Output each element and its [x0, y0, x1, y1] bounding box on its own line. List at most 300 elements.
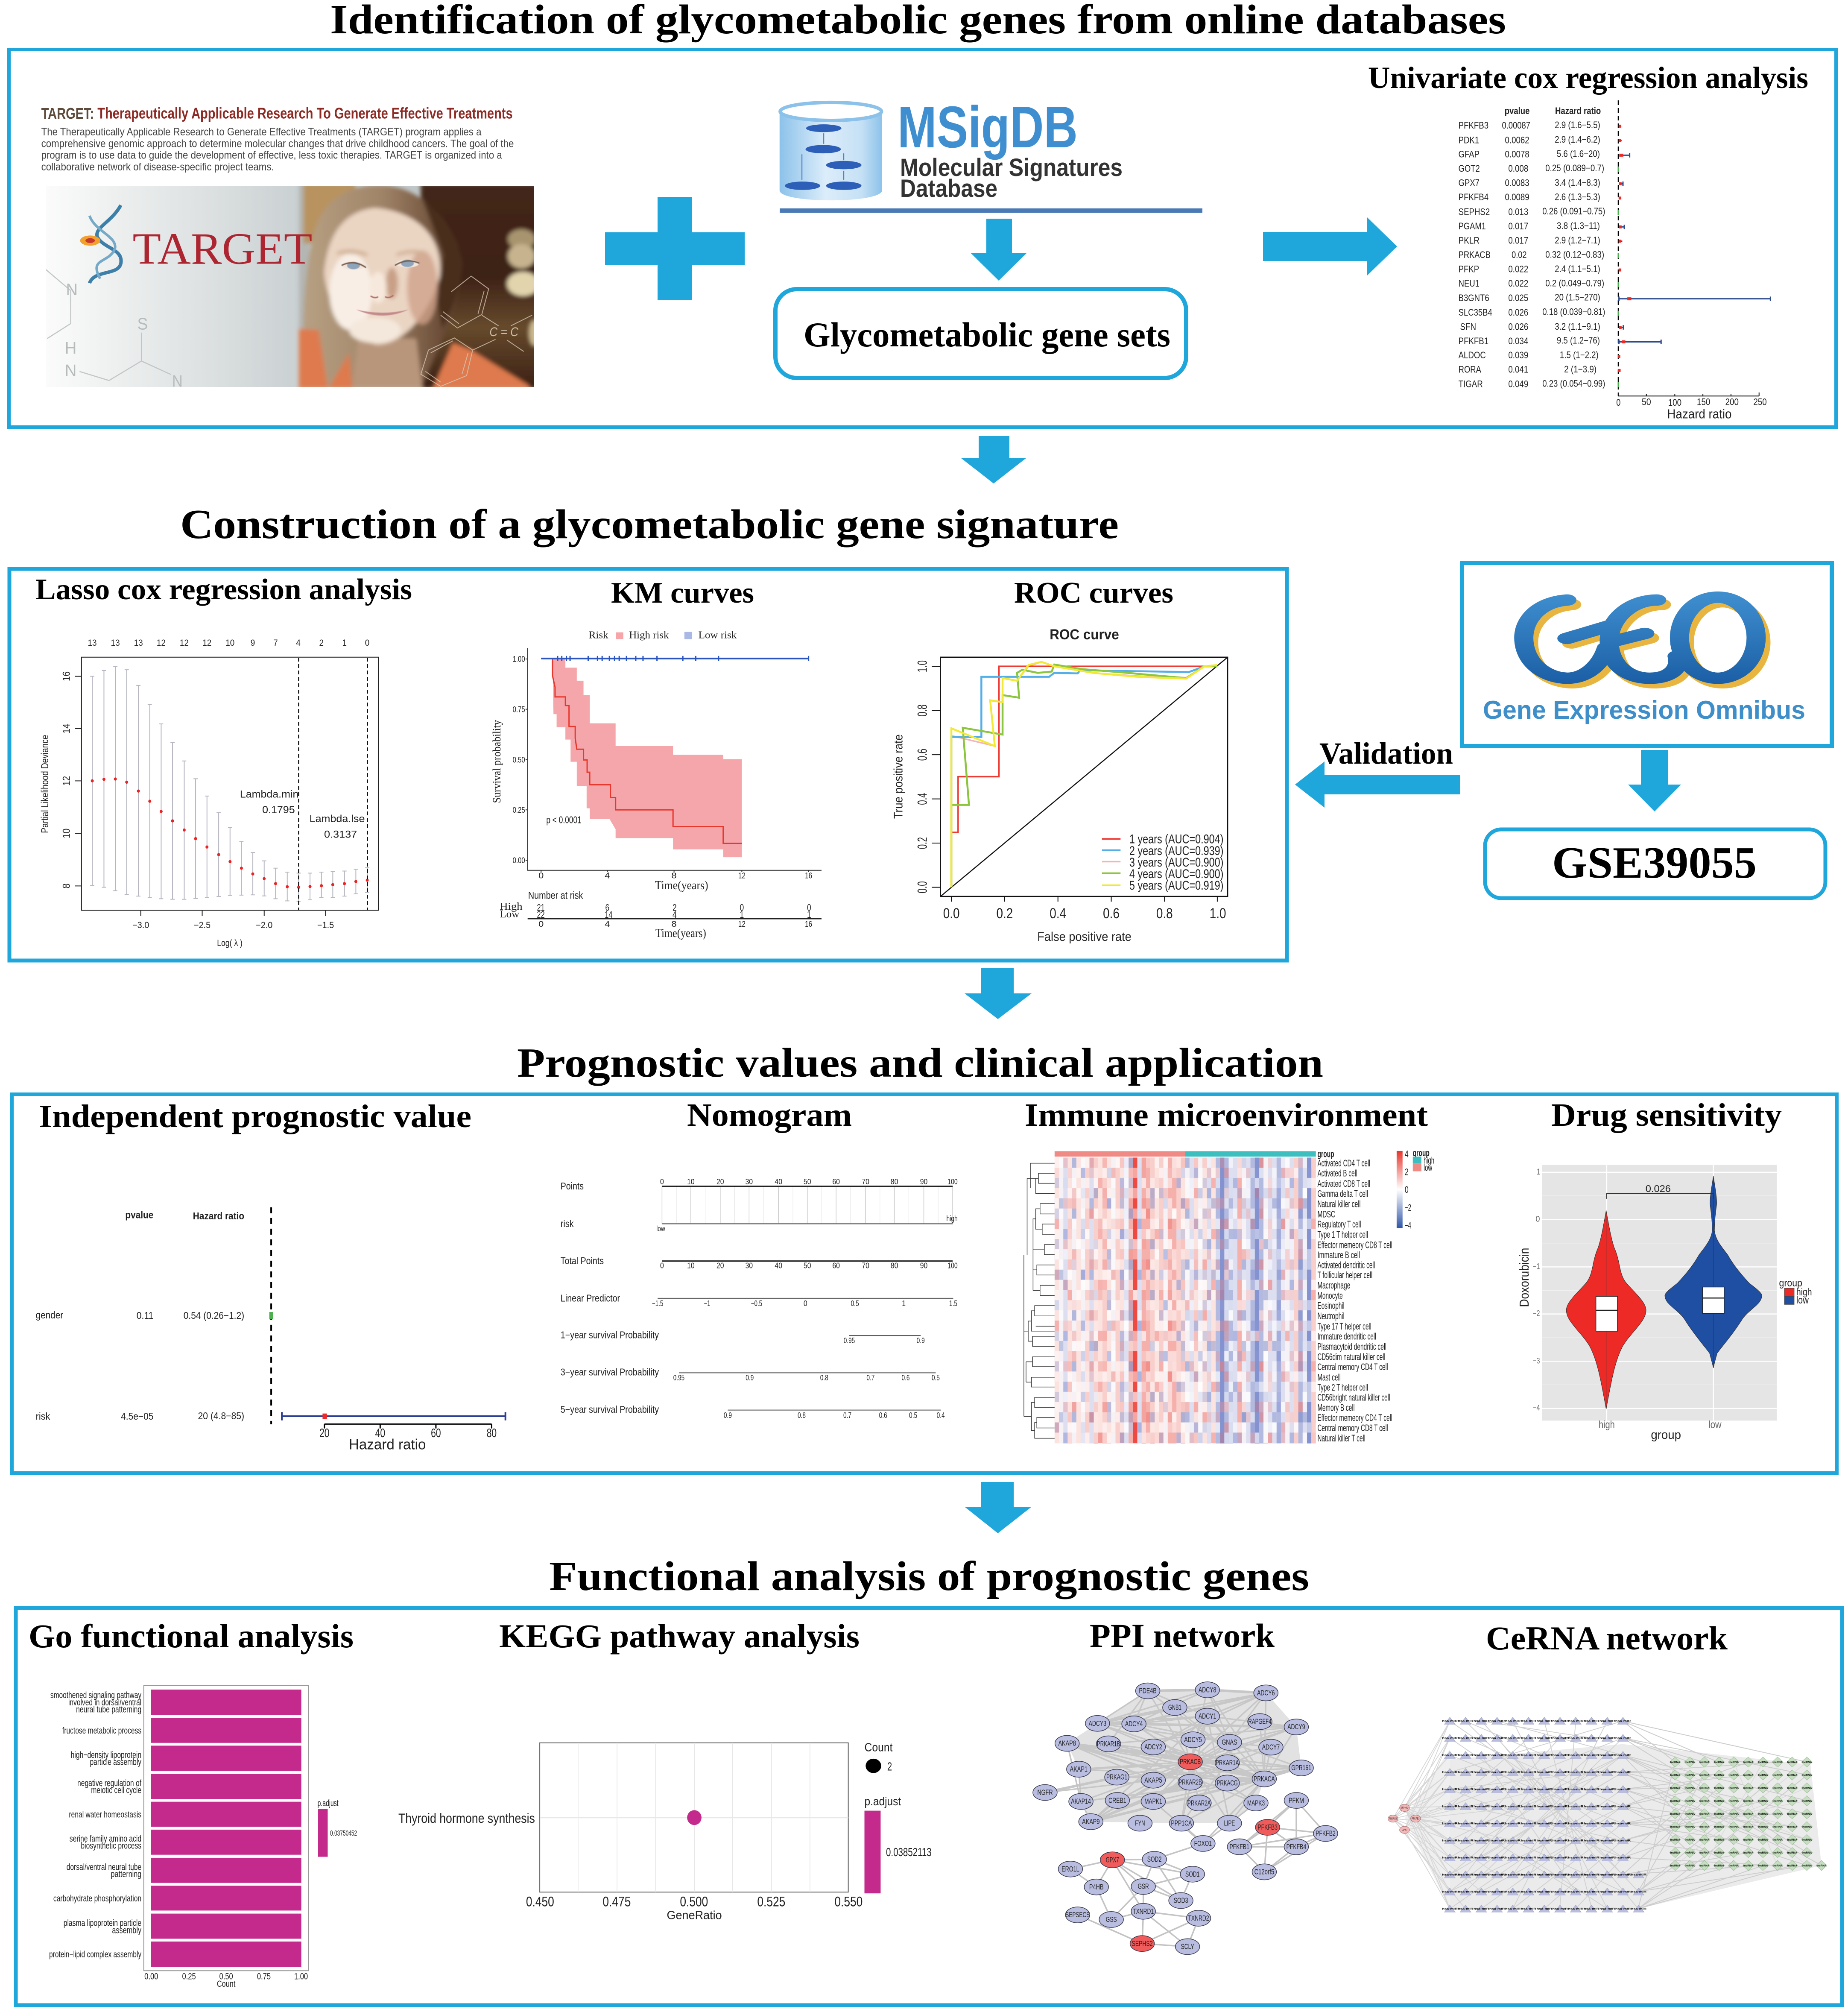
- lasso chart: −3.0: [132, 920, 149, 930]
- PPI network graph: CREB1: [1108, 1796, 1126, 1804]
- forest plot: univariate: [1459, 100, 1770, 421]
- GO bar chart: assembly: [112, 1925, 141, 1936]
- panel: online databases: program is to use data to guide the development of effective, less toxic therapies. TARGET is organized into a: [41, 149, 502, 161]
- forest plot: independent: Hazard ratio: [193, 1211, 244, 1221]
- forest plot: univariate: GOT2: [1459, 163, 1480, 174]
- GO bar chart: negative regulation of: [77, 1778, 141, 1788]
- forest plot: univariate: 0.26 (0.091−0.75): [1542, 206, 1605, 217]
- heatmap: 2: [1405, 1166, 1409, 1177]
- KM survival chart: 8: [672, 919, 677, 928]
- forest plot: independent: [36, 1207, 506, 1453]
- forest plot: univariate: 200: [1725, 396, 1739, 407]
- GO bar chart: neural tube patterning: [76, 1705, 141, 1715]
- heatmap: Gamma delta T cell: [1317, 1188, 1368, 1199]
- heatmap: Macrophage: [1317, 1280, 1350, 1291]
- arrow: section 1 to 2: [961, 436, 1026, 483]
- forest plot: univariate: SFN: [1460, 321, 1476, 332]
- lasso chart: 8: [61, 884, 72, 888]
- panel: functional analysis: 0.03750452: [330, 1829, 357, 1837]
- arrow: section 3 to 4: [965, 1482, 1032, 1533]
- TARGET description block: [41, 105, 514, 173]
- heatmap: Immature dendritic cell: [1317, 1331, 1376, 1341]
- GO bar chart: meiotic cell cycle: [91, 1785, 141, 1795]
- forest plot: univariate: PFKP: [1459, 264, 1479, 275]
- nomogram chart: 80: [891, 1261, 898, 1270]
- label: validation: Validation: [1319, 736, 1453, 770]
- lasso chart: −1.5: [317, 920, 334, 930]
- forest plot: univariate: 100: [1668, 397, 1681, 408]
- PPI network graph: PFKM: [1289, 1796, 1304, 1804]
- forest plot: univariate: 0.00087: [1502, 120, 1530, 131]
- lasso chart: 7: [273, 638, 278, 648]
- KM survival chart: 1.00: [513, 654, 525, 664]
- KM survival chart: Low risk: [699, 629, 737, 641]
- violin plot: group: [1651, 1428, 1681, 1441]
- PPI network graph: AKAP8: [1058, 1739, 1076, 1748]
- panel: prognostic values: 1.5: [949, 1299, 957, 1308]
- GO bar chart: biosynthetic process: [81, 1841, 141, 1851]
- heatmap: Type 2 T helper cell: [1317, 1382, 1368, 1393]
- forest plot: independent: risk: [36, 1411, 50, 1422]
- violin plot: 1: [1537, 1167, 1541, 1177]
- KM survival chart: Number at risk: [528, 890, 583, 901]
- heatmap: Natural killer cell: [1317, 1199, 1360, 1209]
- PPI network graph: ERO1L: [1061, 1865, 1079, 1873]
- violin plot: −3: [1533, 1356, 1540, 1365]
- forest plot: univariate: 0.025: [1508, 293, 1528, 303]
- PPI network graph: C12orf5: [1254, 1868, 1274, 1876]
- KM survival chart: 6: [605, 902, 609, 913]
- PPI network graph: SEPSECS: [1065, 1911, 1090, 1919]
- forest plot: univariate: 0.017: [1508, 235, 1528, 246]
- PPI network graph: GPX7: [1106, 1856, 1119, 1864]
- forest plot: univariate: 2.9 (1.2−7.1): [1555, 235, 1600, 246]
- girl portrait: C = C: [489, 325, 519, 339]
- GO bar chart: fructose metabolic process: [62, 1725, 141, 1736]
- forest plot: univariate: PFKFB1: [1459, 335, 1488, 346]
- forest plot: independent: 80: [487, 1426, 497, 1440]
- KEGG dot plot: 0.550: [834, 1894, 863, 1909]
- KM survival chart: 4: [605, 871, 610, 880]
- ROC chart: 0.2: [915, 837, 930, 849]
- lasso chart: Lambda.lse: [310, 813, 365, 824]
- forest plot: univariate: 0: [1616, 397, 1620, 408]
- CeRNA network graph: PFKFB3: [1412, 1817, 1419, 1820]
- nomogram chart: Total Points: [561, 1256, 604, 1266]
- nomogram chart: 0.9: [746, 1374, 754, 1382]
- girl portrait: [299, 184, 540, 389]
- panel frame: [9, 50, 1836, 427]
- nomogram chart: 40: [775, 1261, 782, 1270]
- heatmap: Activated CD4 T cell: [1317, 1158, 1370, 1169]
- GO bar chart: protein−lipid complex assembly: [49, 1949, 141, 1959]
- lasso chart: 16: [61, 671, 72, 681]
- forest plot: univariate: 0.022: [1508, 264, 1528, 275]
- lasso chart: 10: [225, 638, 234, 648]
- nomogram chart: −0.5: [751, 1299, 762, 1308]
- lasso chart: 9: [251, 638, 255, 648]
- KM survival chart: 16: [805, 871, 812, 880]
- arrow: to univariate analysis: [1263, 217, 1397, 275]
- PPI network graph: ADCY9: [1287, 1723, 1305, 1731]
- PPI network graph: MAPK3: [1247, 1799, 1265, 1807]
- nomogram chart: Points: [561, 1181, 584, 1192]
- forest plot: independent: 20 (4.8−85): [198, 1411, 244, 1421]
- KEGG dot plot: 0.525: [757, 1894, 785, 1909]
- KM survival chart: Survival probability: [490, 720, 503, 803]
- ROC chart: 0.4: [1050, 905, 1066, 922]
- nomogram chart: 20: [716, 1261, 724, 1270]
- forest plot: univariate: 0.0083: [1505, 177, 1529, 188]
- panel: functional analysis: 0.03852113: [886, 1845, 932, 1859]
- forest plot: univariate: 3.2 (1.1−9.1): [1555, 321, 1600, 332]
- GO bar chart: 0.50: [219, 1971, 233, 1981]
- ROC chart: True positive rate: [891, 734, 905, 819]
- nomogram chart: 0.5: [932, 1374, 940, 1382]
- nomogram chart: 0.95: [673, 1374, 684, 1382]
- PPI network graph: NGFR: [1037, 1788, 1053, 1797]
- heatmap: −4: [1405, 1220, 1411, 1230]
- forest plot: univariate: GFAP: [1459, 149, 1480, 160]
- forest plot: independent: Hazard ratio: [349, 1436, 426, 1453]
- lasso chart: Lambda.min: [240, 788, 298, 800]
- nomogram chart: 0.6: [901, 1374, 910, 1382]
- KM survival chart: [490, 629, 822, 940]
- KM survival chart: 0: [740, 902, 744, 913]
- PPI network graph: [1033, 1682, 1338, 1955]
- box: glycometabolic gene sets: Glycometabolic gene sets: [804, 315, 1170, 354]
- panel: prognostic values: high: [1796, 1286, 1812, 1297]
- nomogram chart: 90: [920, 1177, 927, 1186]
- KM survival chart: 16: [805, 919, 812, 928]
- panel: signature construction: 1 years (AUC=0.904): [1129, 832, 1223, 846]
- PPI network graph: LIPE: [1224, 1819, 1235, 1828]
- forest plot: univariate: PFKFB4: [1459, 192, 1488, 202]
- nomogram chart: 10: [687, 1177, 695, 1186]
- nomogram chart: −1.5: [652, 1299, 663, 1308]
- GO bar chart: serine family amino acid: [70, 1833, 141, 1844]
- lasso chart: 0: [365, 638, 369, 648]
- MSigDB logo: Database: [900, 175, 997, 202]
- box: GSE39055: [1485, 829, 1825, 898]
- PPI network graph: MAPK1: [1144, 1797, 1162, 1806]
- forest plot: univariate: 50: [1642, 396, 1651, 407]
- ROC chart: [891, 626, 1228, 943]
- title: prognostic: Prognostic values and clinical application: [517, 1040, 1323, 1086]
- panel: prognostic values: 100: [947, 1177, 958, 1186]
- ROC chart: 0.0: [915, 881, 930, 893]
- PPI network graph: ADCY2: [1144, 1743, 1162, 1751]
- forest plot: univariate: 0.041: [1508, 364, 1528, 375]
- lasso chart: 13: [111, 638, 120, 648]
- panel: prognostic values: Central memory CD8 T cell: [1317, 1423, 1388, 1433]
- KM survival chart: 0: [538, 919, 544, 928]
- nomogram chart: 30: [745, 1261, 753, 1270]
- nomogram chart: 40: [775, 1177, 782, 1186]
- forest plot: independent: 60: [431, 1426, 441, 1440]
- MSigDB logo: Molecular Signatures: [900, 154, 1123, 182]
- panel: prognostic values: [12, 1094, 1837, 1473]
- nomogram chart: 10: [687, 1261, 695, 1270]
- nomogram chart: 0.8: [820, 1374, 828, 1382]
- heading: CeRNA: CeRNA network: [1486, 1620, 1728, 1657]
- KM survival chart: High risk: [629, 629, 669, 641]
- heading: PPI: PPI network: [1090, 1617, 1275, 1654]
- GEO swirl mark with text name: [1524, 597, 1761, 683]
- PPI network graph: ADCY8: [1199, 1686, 1216, 1694]
- forest plot: univariate: Hazard ratio: [1555, 105, 1601, 116]
- forest plot: univariate: GPX7: [1459, 177, 1480, 188]
- violin plot: high: [1599, 1419, 1615, 1431]
- panel: prognostic values: CD56bright natural killer cell: [1317, 1392, 1390, 1403]
- KM survival chart: 0.75: [513, 704, 525, 714]
- ROC chart: 0.6: [1103, 905, 1120, 922]
- nomogram chart: risk: [561, 1218, 574, 1229]
- PPI network graph: PRKAR2B: [1178, 1778, 1202, 1787]
- CeRNA network graph: [1388, 1714, 1829, 1919]
- panel: prognostic values: 100: [947, 1261, 958, 1270]
- lasso chart: 0.3137: [324, 828, 357, 840]
- PPI network graph: PRKACB: [1180, 1757, 1201, 1766]
- GO bar chart: [49, 1686, 357, 1989]
- PPI network graph: ADCY1: [1199, 1712, 1216, 1720]
- PPI network graph: FYN: [1135, 1819, 1145, 1828]
- forest plot: univariate: B3GNT6: [1459, 293, 1489, 303]
- heatmap: Mast cell: [1317, 1372, 1341, 1382]
- nomogram chart: 0.95: [844, 1336, 855, 1345]
- KM survival chart: 1: [807, 910, 811, 920]
- forest plot: univariate: 150: [1697, 396, 1710, 407]
- forest plot: univariate: 0.039: [1508, 350, 1528, 360]
- GEO logo box: Gene Expression Omnibus: [1483, 696, 1805, 724]
- KM survival chart: 4: [605, 919, 610, 928]
- KEGG dot plot: 2: [887, 1760, 892, 1773]
- KEGG dot plot: [398, 1740, 932, 1922]
- heatmap: Immature B cell: [1317, 1250, 1360, 1260]
- nomogram chart: 60: [832, 1261, 840, 1270]
- forest plot: univariate: 0.32 (0.12−0.83): [1545, 249, 1604, 260]
- KEGG dot plot: 0.500: [680, 1894, 708, 1909]
- lasso chart: 13: [134, 638, 143, 648]
- PPI network graph: GPR161: [1291, 1764, 1311, 1772]
- violin plot: 0.026: [1646, 1183, 1671, 1194]
- panel: online databases: [9, 50, 1836, 427]
- panel: online databases: The Therapeutically Applicable Research to Generate Effective Treatments (TARGET) program applies a: [41, 126, 482, 138]
- heatmap: Natural killer T cell: [1317, 1433, 1366, 1444]
- GO bar chart: 1.00: [294, 1971, 308, 1981]
- nomogram chart: 0.4: [937, 1411, 945, 1420]
- heatmap: Eosinophil: [1317, 1300, 1345, 1311]
- heading: nomogram: Nomogram: [687, 1097, 852, 1133]
- forest plot: univariate: 0.0062: [1505, 135, 1529, 145]
- GO bar chart: dorsal/ventral neural tube: [67, 1862, 141, 1872]
- GO bar chart: involved in dorsal/ventral: [68, 1697, 141, 1707]
- CeRNA network graph: SEPHS2: [1401, 1806, 1409, 1810]
- forest plot: univariate: 0.0078: [1505, 149, 1529, 160]
- panel: prognostic values: high: [946, 1214, 958, 1223]
- panel: functional analysis: [16, 1608, 1842, 2005]
- violin plot: −1: [1533, 1262, 1540, 1271]
- forest plot: univariate: 0.022: [1508, 278, 1528, 289]
- KM survival chart: 12: [738, 871, 746, 880]
- lasso chart: 0.1795: [262, 804, 295, 816]
- PPI network graph: RAPGEF4: [1248, 1717, 1272, 1726]
- PPI network graph: ADCY7: [1262, 1743, 1280, 1751]
- KM survival chart: 0.00: [513, 855, 525, 865]
- forest plot: univariate: ALDOC: [1459, 350, 1486, 360]
- violin plot: [1517, 1165, 1812, 1441]
- forest plot: univariate: 0.017: [1508, 221, 1528, 231]
- heatmap: −2: [1405, 1202, 1411, 1213]
- panel: signature construction: 5 years (AUC=0.919): [1129, 878, 1223, 892]
- lasso chart: 12: [180, 638, 189, 648]
- TARGET logo and chemistry marks: N: [65, 361, 76, 380]
- forest plot: univariate: 0.18 (0.039−0.81): [1542, 306, 1605, 317]
- forest plot: univariate: PDK1: [1459, 135, 1479, 145]
- nomogram chart: [561, 1177, 958, 1420]
- TARGET logo and chemistry marks: TARGET: [132, 224, 312, 273]
- ROC chart: 0.6: [915, 749, 930, 761]
- GO bar chart: particle assembly: [90, 1757, 141, 1767]
- PPI network graph: SOD3: [1174, 1896, 1188, 1905]
- nomogram chart: 1−year survival Probability: [561, 1330, 659, 1341]
- forest plot: univariate: PGAM1: [1459, 221, 1486, 231]
- KM survival chart: 14: [605, 910, 612, 920]
- forest plot: univariate: 9.5 (1.2−76): [1557, 335, 1600, 346]
- nomogram chart: 0.9: [917, 1336, 925, 1345]
- lasso chart: 14: [61, 723, 72, 733]
- lasso chart: −2.5: [194, 920, 211, 930]
- nomogram chart: Linear Predictor: [561, 1293, 620, 1303]
- nomogram chart: low: [656, 1224, 665, 1233]
- heatmap: [1024, 1148, 1434, 1444]
- forest plot: univariate: RORA: [1459, 364, 1481, 375]
- forest plot: univariate: 0.23 (0.054−0.99): [1542, 378, 1605, 389]
- PPI network graph: GNB1: [1168, 1703, 1181, 1712]
- panel frame: [12, 1094, 1837, 1473]
- KM survival chart: 4: [673, 910, 677, 920]
- forest plot: univariate: 0.034: [1508, 335, 1528, 346]
- KEGG dot plot: Thyroid hormone synthesis: [398, 1810, 535, 1825]
- PPI network graph: PRKAR1B: [1097, 1740, 1120, 1748]
- heading: GO: Go functional analysis: [29, 1617, 354, 1655]
- lasso chart: 12: [202, 638, 211, 648]
- lasso chart: 13: [88, 638, 97, 648]
- forest plot: univariate: 2.6 (1.3−5.3): [1555, 191, 1600, 202]
- forest plot: univariate: 0.026: [1508, 307, 1528, 318]
- ROC chart: 0.8: [915, 705, 930, 717]
- heading: immune microenvironment: Immune microenvironment: [1025, 1097, 1428, 1133]
- PPI network graph: PFKFB1: [1229, 1842, 1249, 1851]
- PPI network graph: AKAP5: [1144, 1776, 1162, 1784]
- panel frame: [16, 1608, 1842, 2005]
- forest plot: univariate: SEPHS2: [1459, 206, 1490, 217]
- nomogram chart: −1: [704, 1299, 710, 1308]
- ROC chart: 0.0: [943, 905, 959, 922]
- nomogram chart: 1: [902, 1299, 906, 1308]
- KM survival chart: p < 0.0001: [546, 814, 582, 826]
- lasso chart: [39, 638, 378, 948]
- forest plot: univariate: 2.9 (1.6−5.5): [1555, 120, 1600, 130]
- forest plot: univariate: PRKACB: [1459, 249, 1491, 260]
- heatmap: Activated B cell: [1317, 1168, 1357, 1178]
- ROC chart: False positive rate: [1037, 929, 1132, 943]
- arrow: MSigDB to gene sets: [971, 219, 1026, 281]
- title: functional analysis: Functional analysis of prognostic genes: [549, 1553, 1309, 1599]
- heatmap: Activated CD8 T cell: [1317, 1178, 1370, 1189]
- lasso chart: −2.0: [256, 920, 272, 930]
- nomogram chart: 20: [716, 1177, 724, 1186]
- KM survival chart: High: [500, 901, 523, 912]
- nomogram chart: 0.9: [724, 1411, 732, 1420]
- TARGET logo and chemistry marks: S: [137, 314, 148, 333]
- GO bar chart: 0.00: [144, 1971, 158, 1981]
- forest plot: univariate: 0.2 (0.049−0.79): [1545, 278, 1604, 288]
- PPI network graph: SCLY: [1181, 1942, 1194, 1951]
- KM survival chart: Low: [500, 908, 520, 920]
- lasso chart: 12: [61, 776, 72, 786]
- nomogram chart: 50: [804, 1177, 811, 1186]
- KEGG dot plot: 0.450: [526, 1894, 554, 1909]
- forest plot: independent: pvalue: [125, 1210, 153, 1221]
- GO bar chart: 0.75: [257, 1971, 271, 1981]
- title: construction: Construction of a glycometabolic gene signature: [180, 501, 1119, 548]
- CeRNA network graph: PRKACB: [1389, 1817, 1397, 1820]
- nomogram chart: 3−year survival Probability: [561, 1367, 659, 1378]
- forest plot: univariate: Hazard ratio: [1667, 407, 1732, 421]
- TARGET logo and chemistry marks: N: [172, 372, 183, 390]
- arrow: section 2 to 3: [965, 968, 1032, 1019]
- violin plot: −4: [1533, 1403, 1540, 1412]
- PPI network graph: SOD2: [1147, 1855, 1161, 1863]
- heatmap: group: [1317, 1148, 1334, 1159]
- GO bar chart: p.adjust: [318, 1798, 339, 1808]
- panel: prognostic values: low: [1424, 1163, 1432, 1173]
- panel: prognostic values: CD56dim natural killer cell: [1317, 1352, 1385, 1362]
- panel: online databases: comprehensive genomic approach to determine molecular changes that drive childhood cancers. The goal of the: [41, 138, 514, 149]
- KM survival chart: Time(years): [655, 926, 706, 940]
- PPI network graph: FOXO1: [1194, 1839, 1212, 1848]
- panel: online databases: TARGET: Therapeutically Applicable Research To Generate Effective Treatments: [41, 105, 513, 122]
- lasso chart: Partial Likelihood Deviance: [39, 735, 51, 833]
- panel: prognostic values: Plasmacytoid dendritic cell: [1317, 1341, 1386, 1352]
- nomogram chart: 0.5: [909, 1411, 917, 1420]
- forest plot: univariate: 0.049: [1508, 378, 1528, 390]
- arrow: GEO to GSE39055: [1628, 750, 1681, 811]
- lasso chart: 10: [61, 829, 72, 838]
- KM survival chart: 1: [740, 910, 744, 920]
- heading: KM curves: KM curves: [611, 577, 754, 609]
- nomogram chart: 60: [832, 1177, 840, 1186]
- forest plot: univariate: 0.026: [1508, 321, 1528, 332]
- box: glycometabolic gene sets: [775, 289, 1186, 378]
- forest plot: univariate: 250: [1753, 396, 1767, 407]
- box: GSE39055: GSE39055: [1552, 838, 1757, 887]
- lasso chart: 4: [296, 638, 301, 648]
- GO bar chart: smoothened signaling pathway: [50, 1690, 141, 1700]
- panel: prognostic values: low: [1796, 1294, 1809, 1306]
- nomogram chart: 0.6: [879, 1411, 887, 1420]
- lasso chart: 1: [342, 638, 347, 648]
- heading: ROC curves: ROC curves: [1014, 577, 1173, 609]
- forest plot: univariate: 3.4 (1.4−8.3): [1555, 177, 1600, 188]
- forest plot: univariate: 0.0089: [1505, 192, 1529, 202]
- GO bar chart: plasma lipoprotein particle: [64, 1918, 141, 1928]
- heatmap: Neutrophil: [1317, 1311, 1345, 1321]
- forest plot: independent: 40: [375, 1426, 385, 1440]
- PPI network graph: PRKACA: [1254, 1775, 1275, 1783]
- TARGET logo and chemistry marks: N: [66, 280, 78, 299]
